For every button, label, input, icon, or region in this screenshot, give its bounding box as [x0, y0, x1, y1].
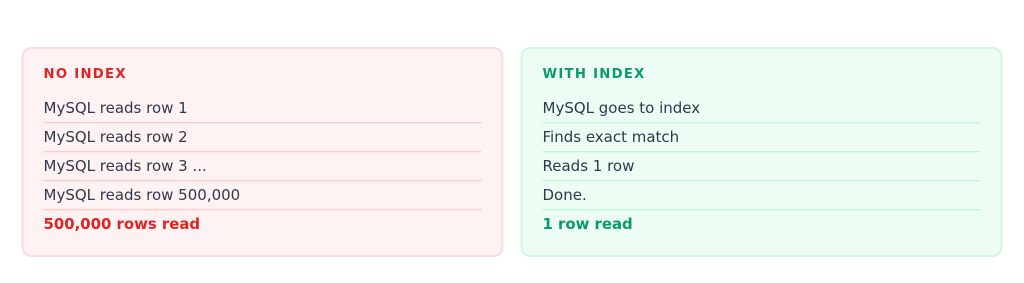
result: one row read: 1 row read [542, 215, 633, 233]
heading: with index: WITH INDEX [542, 67, 646, 82]
step: row 3: MySQL reads row 3 ... [44, 157, 207, 175]
step: row 2: MySQL reads row 2 [44, 128, 188, 146]
step: done: Done. [542, 186, 587, 204]
step: row 1 [44, 93, 482, 123]
step: goes to index: MySQL goes to index [542, 99, 700, 117]
step: reads one row [542, 151, 980, 181]
panel: with index [520, 47, 1002, 256]
panel: no index [22, 47, 504, 256]
step: row 500,000 [44, 180, 482, 210]
heading: no index: NO INDEX [44, 67, 127, 82]
step: goes to index [542, 93, 980, 123]
step: row 500,000: MySQL reads row 500,000 [44, 186, 240, 204]
step: row 1: MySQL reads row 1 [44, 99, 188, 117]
step: reads one row: Reads 1 row [542, 157, 634, 175]
result: rows read: 500,000 rows read [44, 215, 200, 233]
step: row 3 [44, 151, 482, 181]
step: row 2 [44, 122, 482, 152]
step: finds match: Finds exact match [542, 128, 679, 146]
step: done [542, 180, 980, 210]
step: finds match [542, 122, 980, 152]
